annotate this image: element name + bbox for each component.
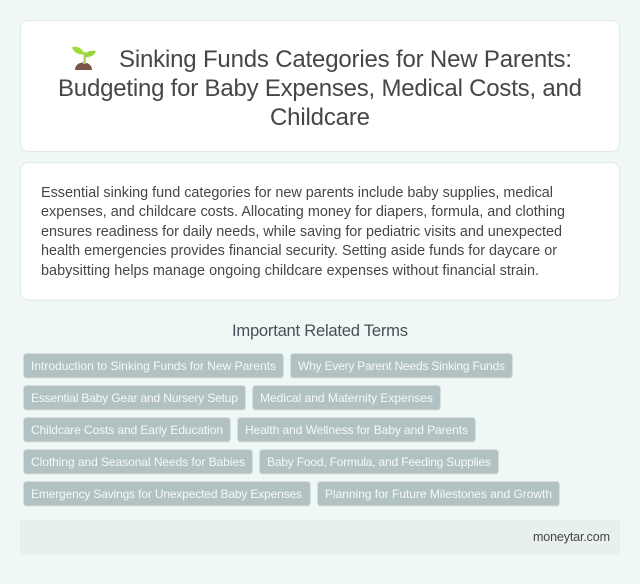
panel: title card <box>20 20 620 152</box>
tag: future milestones <box>318 482 560 506</box>
tag: why every parent: Why Every Parent Needs Sinking Funds <box>298 359 505 373</box>
tag: baby food <box>260 450 498 474</box>
tag: medical <box>252 386 440 410</box>
description text: babysitting helps manage ongoing childcare expenses without financial strain. <box>41 263 539 279</box>
description text: health emergencies provides financial security. Setting aside funds for daycare or <box>41 243 557 259</box>
tag: baby food: Baby Food, Formula, and Feeding Supplies <box>267 455 491 469</box>
description text: Essential sinking fund categories for new parents include baby supplies, medical <box>41 185 553 201</box>
title text: Budgeting for Baby Expenses, Medical Costs, and <box>58 75 582 102</box>
tag: clothing <box>24 450 252 474</box>
tag: childcare <box>24 418 230 442</box>
tag: health: Health and Wellness for Baby and Parents <box>245 423 468 437</box>
tag: health <box>238 418 476 442</box>
panel: description card <box>20 162 620 300</box>
footer bar <box>20 520 620 554</box>
tag: emergency savings <box>24 482 310 506</box>
tag: emergency savings: Emergency Savings for Unexpected Baby Expenses <box>31 487 302 501</box>
tag: why every parent <box>290 354 512 378</box>
title text: Sinking Funds Categories for New Parents: <box>119 46 572 73</box>
description text <box>41 185 565 279</box>
footer source text: moneytar.com <box>533 530 610 544</box>
tag: future milestones: Planning for Future Milestones and Growth <box>325 487 552 501</box>
icon: seedling <box>72 47 96 70</box>
title text: Childcare <box>270 104 370 131</box>
title text <box>58 46 582 131</box>
tag list <box>24 354 560 506</box>
tag: introduction: Introduction to Sinking Funds for New Parents <box>31 359 276 373</box>
tag: medical: Medical and Maternity Expenses <box>260 391 433 405</box>
tag: baby gear: Essential Baby Gear and Nursery Setup <box>31 391 238 405</box>
tag: clothing: Clothing and Seasonal Needs for Babies <box>31 455 245 469</box>
tag: baby gear <box>24 386 246 410</box>
description text: expenses, and childcare costs. Allocating money for diapers, formula, and clothing <box>41 204 565 220</box>
heading: important related terms: Important Related Terms <box>232 321 408 340</box>
tag: introduction <box>24 354 284 378</box>
description text: ensures readiness for daily needs, while saving for pediatric visits and unexpected <box>41 224 562 240</box>
tag: childcare: Childcare Costs and Early Education <box>31 423 223 437</box>
